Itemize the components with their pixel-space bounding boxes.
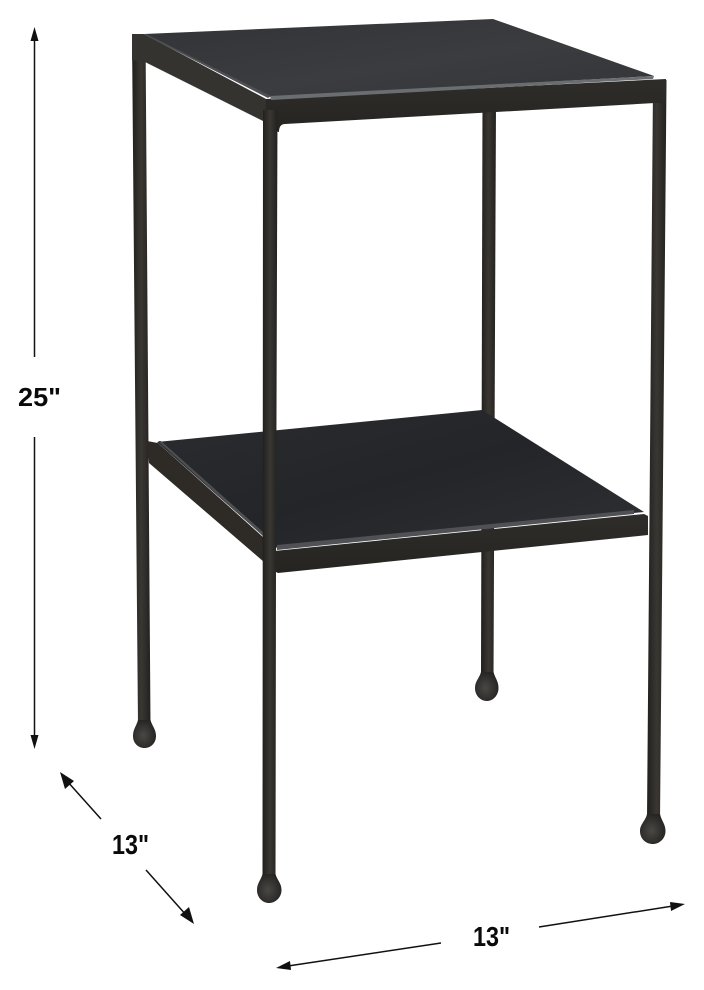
back right leg: [475, 100, 498, 701]
table illustration: [132, 19, 666, 903]
front leg: [257, 110, 282, 903]
right leg: [640, 80, 666, 844]
back left leg: [132, 36, 156, 748]
slab left edge: [143, 34, 271, 98]
dimension: height 25 inches: [18, 27, 61, 749]
shelf left apron: [147, 441, 264, 562]
lower shelf: [147, 410, 648, 573]
shelf surface: [157, 410, 644, 548]
shelf front apron: [264, 514, 648, 573]
top frame left apron: [132, 34, 278, 124]
dimension: depth 13 inches: [60, 772, 194, 924]
slab front highlight edge: [270, 76, 654, 100]
top frame front apron: [264, 79, 666, 132]
table top slab: [144, 19, 654, 97]
label: 25 inches: 25": [18, 382, 61, 412]
label: depth 13 inches: 13": [112, 829, 149, 860]
shelf left edge highlight: [158, 441, 263, 536]
shelf front edge highlight: [277, 510, 634, 550]
dimension: width 13 inches: [276, 902, 685, 970]
label: width 13 inches: 13": [473, 921, 510, 952]
